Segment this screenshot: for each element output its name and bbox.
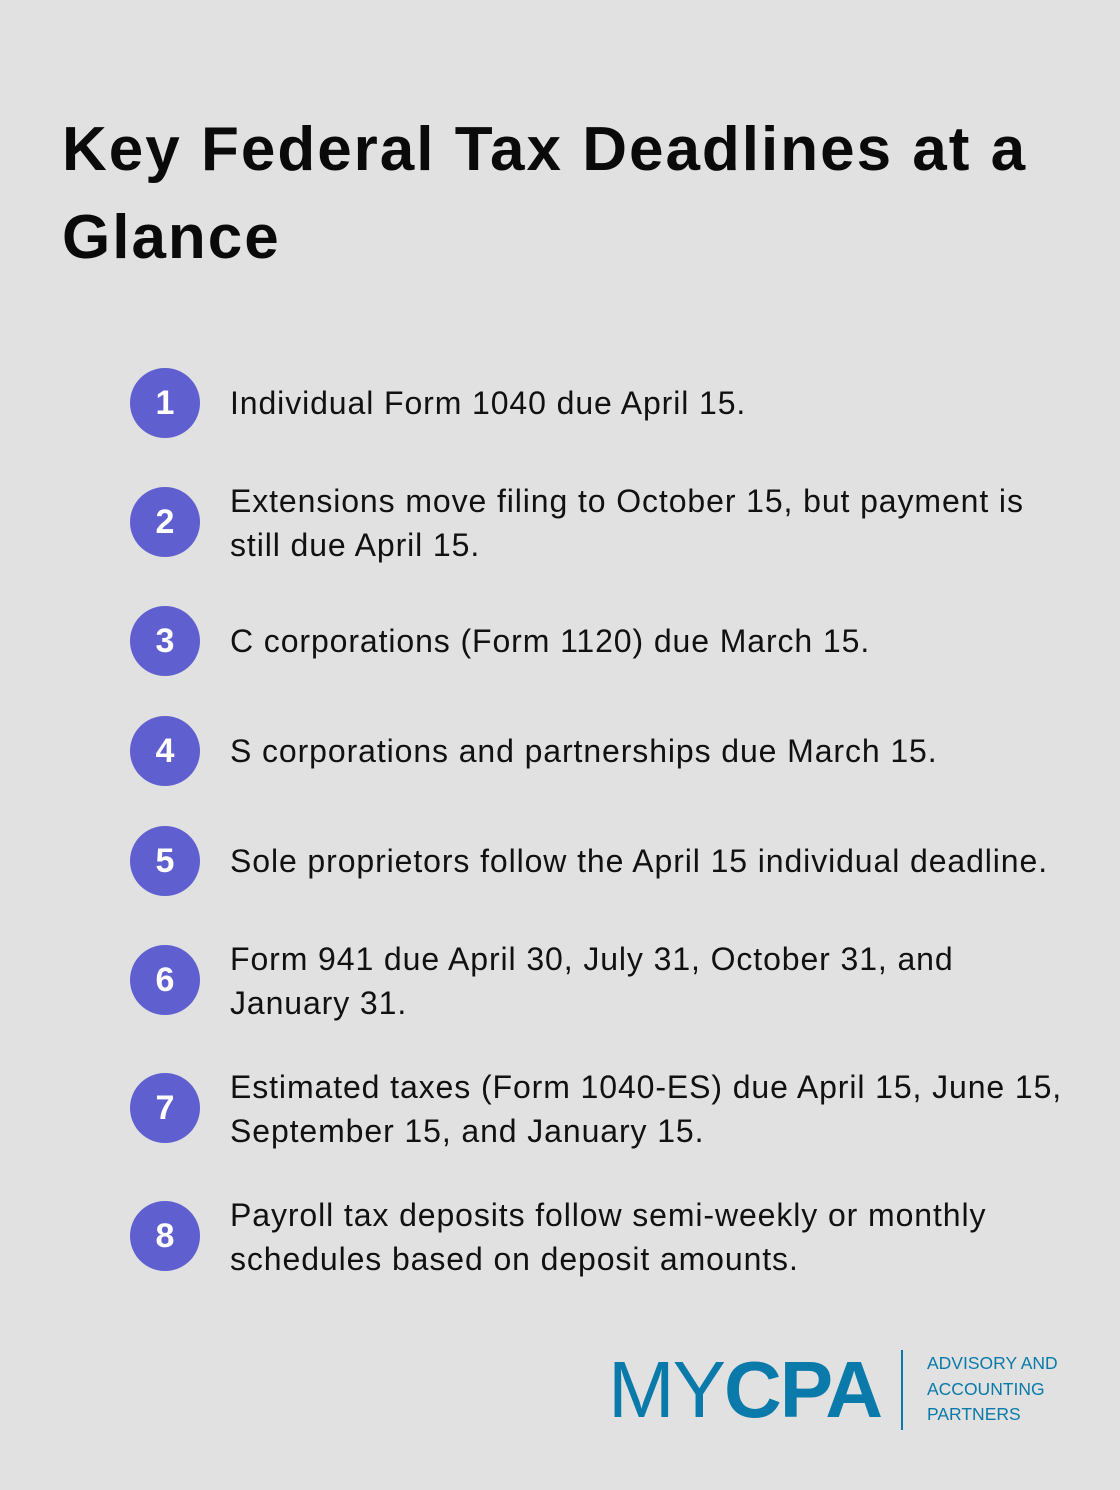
item 2: Extensions move filing to October 15, but payment is still due April 15. <box>230 483 1024 563</box>
item 3 <box>130 606 870 676</box>
item 4: 4 <box>156 732 174 770</box>
item 1: 1 <box>156 384 174 422</box>
item 7: Estimated taxes (Form 1040-ES) due April 15, June 15, September 15, and January 15. <box>230 1069 1062 1149</box>
logo: ACCOUNTING <box>927 1378 1045 1398</box>
logo: PARTNERS <box>927 1404 1021 1424</box>
item 5: 5 <box>156 842 174 880</box>
item 8: 8 <box>156 1217 174 1255</box>
item 5 <box>130 826 1048 896</box>
item 7: 7 <box>156 1089 174 1127</box>
logo: MYCPA <box>608 1345 881 1434</box>
item 6: Form 941 due April 30, July 31, October 31, and January 31. <box>230 941 954 1021</box>
title: Key Federal Tax Deadlines at a Glance <box>62 115 1027 272</box>
item 4 <box>130 716 938 786</box>
item 4: S corporations and partnerships due March 15. <box>230 733 938 769</box>
item 3: C corporations (Form 1120) due March 15. <box>230 623 870 659</box>
logo <box>608 1345 1058 1434</box>
item 6: 6 <box>156 961 174 999</box>
item 2: 2 <box>156 503 174 541</box>
item 8: Payroll tax deposits follow semi-weekly or monthly schedules based on deposit amounts. <box>230 1197 986 1277</box>
item 1: Individual Form 1040 due April 15. <box>230 385 746 421</box>
item 3: 3 <box>156 622 174 660</box>
item 5: Sole proprietors follow the April 15 individual deadline. <box>230 843 1048 879</box>
logo: ADVISORY AND <box>927 1353 1058 1373</box>
item 1 <box>130 368 746 438</box>
